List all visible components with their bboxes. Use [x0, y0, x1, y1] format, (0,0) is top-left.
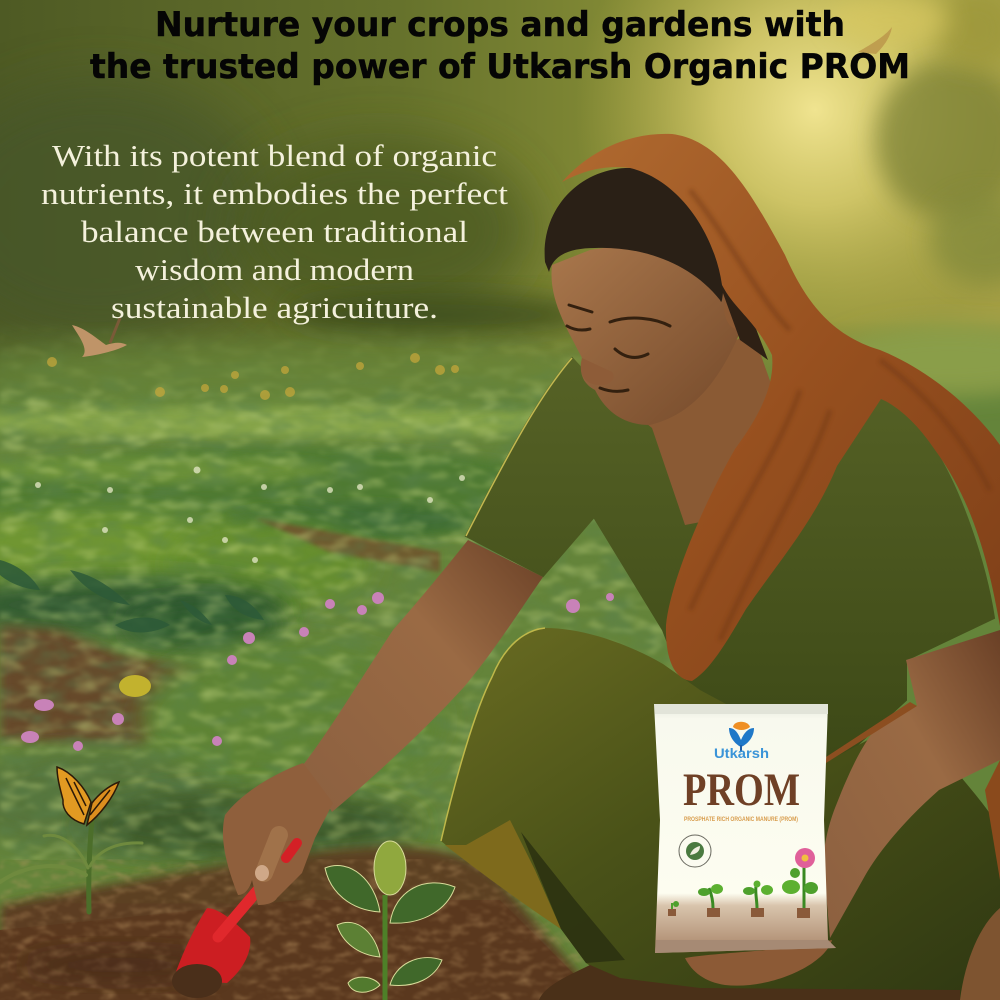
right forearm and upper arm — [823, 630, 1000, 938]
red trowel — [172, 858, 285, 998]
title: the trusted power of Utkarsh Organic PROM — [90, 47, 910, 87]
bird left — [72, 318, 127, 357]
skirt golden lining — [445, 820, 561, 929]
skirt left rim light — [441, 628, 545, 841]
product subtitle: PROSPHATE RICH ORGANIC MANURE (PROM) — [684, 817, 798, 823]
body paragraph: balance between traditional — [81, 214, 468, 249]
skirt — [441, 628, 1000, 1000]
woman gardening — [303, 134, 1000, 1000]
package base crimp — [655, 940, 836, 953]
hand holding trowel — [223, 763, 333, 905]
neck and chest — [648, 338, 770, 525]
green seedling — [325, 841, 455, 1000]
product name: PROM — [683, 764, 800, 816]
soil foreground — [0, 846, 600, 1000]
bird top right — [858, 27, 892, 54]
bodice and sleeves — [466, 358, 994, 770]
organic badge — [679, 835, 711, 867]
dark leg under skirt — [521, 832, 625, 963]
leaf clumps — [0, 560, 264, 632]
field specks and wildflowers — [21, 353, 614, 751]
title — [90, 5, 910, 87]
brand name: Utkarsh — [714, 745, 769, 761]
body paragraph: wisdom and modern — [135, 252, 415, 287]
package seedlings — [668, 848, 818, 918]
brand logo — [729, 722, 754, 752]
left sleeve edge — [466, 358, 572, 536]
hand under package — [685, 940, 832, 986]
butterfly — [57, 767, 119, 825]
small seedling left — [0, 820, 142, 912]
body paragraph: With its potent blend of organic — [52, 138, 497, 173]
background: forest and sunlight — [68, 0, 1000, 381]
scarf folds — [690, 190, 990, 640]
body paragraph: sustainable agricuiture. — [111, 290, 438, 325]
body paragraph — [41, 138, 508, 325]
title: Nurture your crops and gardens with — [155, 5, 845, 45]
feet and hand at base — [539, 965, 960, 1000]
eyes, nose and mouth — [567, 305, 670, 391]
scarf end on hip — [985, 760, 1000, 880]
face — [551, 247, 745, 425]
product package — [654, 704, 836, 953]
waist sash — [826, 702, 917, 763]
body paragraph: nutrients, it embodies the perfect — [41, 176, 508, 211]
working arm — [303, 540, 543, 812]
background: crop field — [0, 320, 1000, 1000]
hair — [545, 168, 724, 302]
headscarf — [562, 134, 1000, 681]
ear — [735, 328, 736, 329]
